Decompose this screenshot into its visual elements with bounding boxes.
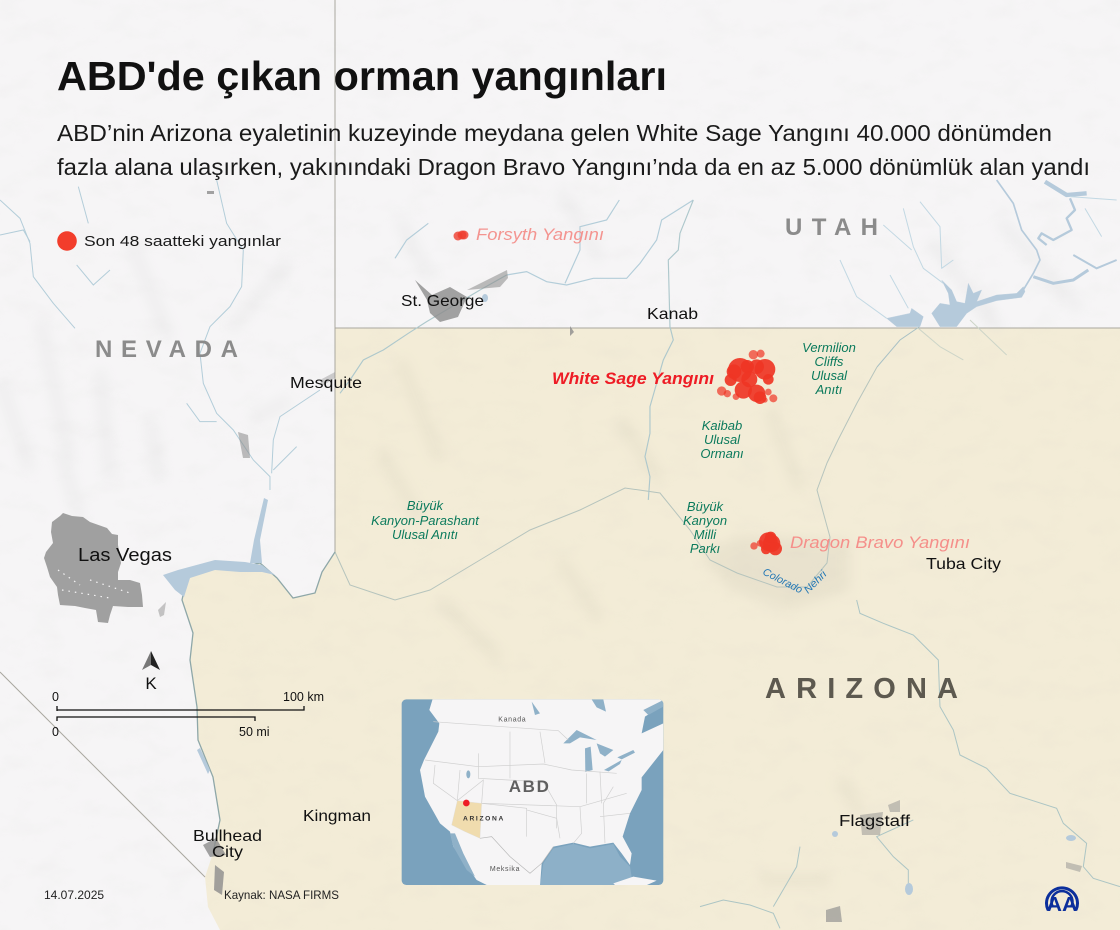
inset locator map: Meksika (490, 866, 520, 873)
river label (761, 566, 830, 596)
city labels: City (212, 844, 243, 861)
protected area labels: Milli (694, 527, 717, 542)
north arrow: K (145, 674, 157, 693)
inset locator map: ABD (509, 777, 551, 796)
protected area labels: Anıtı (815, 382, 843, 397)
soft relief shading (0, 190, 1080, 880)
fire label: Dragon Bravo: Dragon Bravo Yangını (790, 533, 970, 552)
subtitle: fazla alana ulaşırken, yakınındaki Dragon Bravo Yangını’nda da en az 5.000 dönümlük alan yandı (57, 154, 1090, 180)
Arizona west border river (182, 552, 335, 853)
protected area labels: Büyük (687, 499, 725, 514)
fire label: Forsyth: Forsyth Yangını (476, 225, 604, 244)
urban patches (158, 191, 1082, 922)
date: 14.07.2025 (44, 888, 104, 902)
protected area labels: Ulusal (704, 432, 741, 447)
city labels: Las Vegas (78, 545, 172, 565)
protected area labels: Büyük (407, 498, 445, 513)
inset water: gulf, lakes, coastal shelves (450, 699, 663, 887)
inset state borders (425, 722, 630, 873)
protected area labels: Kaibab (702, 418, 742, 433)
fire: Forsyth (454, 230, 468, 240)
protected area labels (371, 340, 856, 556)
city labels: Kanab (647, 306, 698, 323)
inset locator map: ARIZONA (463, 815, 505, 822)
protected area labels: Parkı (690, 541, 721, 556)
state labels: NEVADA (95, 336, 238, 363)
inset labels: Kanada (498, 716, 526, 723)
map region: Arizona (182, 328, 1120, 930)
state labels (95, 214, 958, 705)
city labels: Bullhead (193, 828, 262, 845)
city labels (78, 293, 1001, 861)
inset Arizona (452, 801, 482, 838)
Las Vegas urban area (44, 513, 143, 623)
fire: White Sage (717, 350, 777, 404)
inset fire marker (463, 800, 470, 806)
city labels: Tuba City (926, 556, 1001, 573)
inset Cuba (613, 876, 656, 885)
protected area labels: Ulusal (811, 368, 848, 383)
protected area labels: Vermilion (802, 340, 856, 355)
state labels: ARIZONA (765, 673, 958, 705)
subtitle: ABD’nin Arizona eyaletinin kuzeyinde meydana gelen White Sage Yangını 40.000 dönümden (57, 120, 1052, 146)
city labels: Kingman (303, 808, 371, 825)
inset locator map (400, 697, 667, 887)
protected area labels: Kanyon (683, 513, 727, 528)
scale bar: 0 (52, 690, 59, 704)
protected area labels: Ulusal Anıtı (392, 527, 458, 542)
inset land (420, 697, 663, 887)
title: ABD'de çıkan orman yangınları (57, 53, 667, 99)
protected area labels: Cliffs (815, 354, 844, 369)
protected area labels: Ormanı (700, 446, 744, 461)
rivers in Nevada (0, 180, 320, 490)
Lake Powell and upper Colorado (840, 180, 1117, 360)
protected area labels: Kanyon-Parashant (371, 513, 480, 528)
scale bar: 0 (52, 725, 59, 739)
AA logo: AA (1046, 894, 1078, 916)
Lake Mead and reservoirs (163, 294, 1076, 895)
fire label: White Sage: White Sage Yangını (552, 369, 714, 388)
source: Kaynak: NASA FIRMS (224, 888, 339, 902)
inset ocean (400, 697, 667, 887)
city labels: St. George (401, 293, 484, 310)
city labels: Mesquite (290, 375, 362, 392)
scale bar: 50 mi (239, 725, 270, 739)
scale bar: 100 km (283, 690, 324, 704)
subtitle (57, 120, 1090, 180)
rivers in eastern Arizona (700, 600, 1120, 928)
north arrow (142, 651, 160, 693)
scale bar (52, 690, 324, 739)
legend: Son 48 saatteki yangınlar (84, 233, 281, 250)
legend (57, 231, 281, 251)
river label: Colorado (761, 566, 805, 596)
state labels: UTAH (785, 214, 878, 241)
Colorado River in Arizona (335, 367, 877, 600)
river label: Nehri (802, 568, 830, 596)
city labels: Flagstaff (839, 813, 911, 830)
rivers in Utah, west (340, 200, 693, 500)
fire: Dragon Bravo (750, 532, 782, 555)
